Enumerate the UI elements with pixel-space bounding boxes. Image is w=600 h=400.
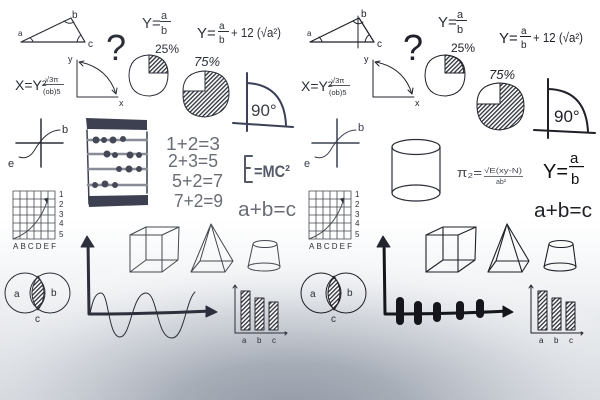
sums: 2+3=5 xyxy=(168,151,218,171)
grid chart xyxy=(13,190,64,251)
formula x=y2: X=Y² xyxy=(15,77,47,93)
grid chart: 3 xyxy=(59,210,64,219)
right angle 90: 90° xyxy=(251,101,277,120)
pie 75% xyxy=(477,67,524,130)
pie 25% xyxy=(425,41,475,96)
pyramid xyxy=(488,224,529,272)
formula y=a/b large: a xyxy=(570,150,579,167)
formula x=y2: X=Y² xyxy=(301,78,333,94)
formula x=y2: (ob)5 xyxy=(43,87,61,96)
venn diagram: b xyxy=(51,288,57,299)
bar chart abc: a xyxy=(242,336,247,345)
grid chart: 2 xyxy=(355,200,360,209)
cylinder xyxy=(392,140,440,201)
grid chart: 4 xyxy=(355,219,360,228)
formula pi: √E(xy-N) xyxy=(484,166,523,175)
pyramid xyxy=(191,224,233,272)
bar chart abc xyxy=(233,285,287,345)
formula y=a/b: a xyxy=(457,9,464,21)
formula y=a/b+12: Y= xyxy=(499,30,518,47)
question mark: ? xyxy=(106,27,126,68)
axis curve xy: y xyxy=(364,54,369,64)
formula y=a/b+12: b xyxy=(219,35,225,46)
axis curve xy xyxy=(364,54,420,108)
triangle abc: a xyxy=(18,29,23,38)
left panel doodles xyxy=(5,10,296,345)
formula y=a/b+12: Y= xyxy=(197,25,216,42)
venn diagram: a xyxy=(14,289,20,300)
grid chart: 3 xyxy=(355,210,360,219)
grid chart: 5 xyxy=(355,230,360,239)
a+b=c: a+b=c xyxy=(534,200,592,222)
venn diagram: c xyxy=(35,314,40,325)
bar chart abc: c xyxy=(272,336,276,345)
formula y=a/b: a xyxy=(161,10,168,22)
grid chart: 2 xyxy=(59,200,64,209)
venn diagram: a xyxy=(310,289,316,300)
bar chart abc: c xyxy=(569,336,573,345)
bar chart abc: b xyxy=(554,336,559,345)
sums: 1+2=3 xyxy=(166,134,220,154)
a+b=c: a+b=c xyxy=(238,199,296,221)
formula x=y2: (ob)5 xyxy=(329,88,347,97)
grid chart: ABCDEF xyxy=(309,242,352,251)
formula y=a/b+12: + 12 (√a²) xyxy=(231,25,281,40)
formula y=a/b xyxy=(438,9,467,36)
cross curve xyxy=(304,119,364,170)
cross curve xyxy=(8,119,68,170)
venn diagram: b xyxy=(347,288,353,299)
triangle with altitude: b xyxy=(361,9,367,20)
e=mc2 xyxy=(245,156,290,182)
axis curve xy xyxy=(68,54,124,108)
axis curve xy: y xyxy=(68,54,73,64)
pie 75% xyxy=(183,54,229,117)
arrow pill chart xyxy=(377,236,513,325)
sums xyxy=(166,134,223,211)
frustum xyxy=(544,240,576,271)
right angle 90 xyxy=(534,79,595,138)
grid chart: 1 xyxy=(355,190,360,199)
question mark: ? xyxy=(403,27,423,68)
formula y=a/b+12: a xyxy=(219,21,225,32)
right angle 90: 90° xyxy=(554,107,580,126)
pie 25%: 25% xyxy=(451,41,475,55)
bar chart abc xyxy=(529,285,583,345)
formula y=a/b: b xyxy=(457,24,463,36)
cube xyxy=(426,227,476,272)
formula y=a/b: Y= xyxy=(142,15,161,32)
formula y=a/b xyxy=(142,10,171,37)
formula y=a/b large: b xyxy=(571,171,579,188)
abacus xyxy=(86,118,148,207)
formula pi: ab² xyxy=(496,179,507,186)
formula y=a/b+12 xyxy=(197,21,281,46)
cross curve: e xyxy=(304,158,310,170)
axis curve xy: x xyxy=(119,98,124,108)
sums: 5+2=7 xyxy=(172,171,223,191)
formula pi xyxy=(457,165,523,186)
sums: 7+2=9 xyxy=(174,191,223,211)
formula y=a/b: Y= xyxy=(438,14,457,31)
grid chart xyxy=(309,190,360,251)
formula x=y2 xyxy=(15,75,64,96)
pie 75%: 75% xyxy=(489,67,515,82)
e=mc2: =MC² xyxy=(254,162,290,181)
grid chart: 4 xyxy=(59,219,64,228)
triangle abc xyxy=(18,10,93,50)
cross curve: e xyxy=(8,158,14,170)
triangle with altitude xyxy=(307,9,382,50)
arrow wave chart xyxy=(81,236,217,338)
formula x=y2: √3π xyxy=(45,75,58,84)
formula y=a/b: b xyxy=(161,25,167,37)
frustum xyxy=(248,240,280,271)
grid chart: ABCDEF xyxy=(13,242,56,251)
grid chart: 1 xyxy=(59,190,64,199)
formula y=a/b+12: b xyxy=(521,40,527,51)
formula y=a/b+12: + 12 (√a²) xyxy=(533,30,583,45)
bar chart abc: a xyxy=(539,336,544,345)
formula y=a/b large xyxy=(543,150,584,188)
triangle abc: c xyxy=(88,39,93,50)
right angle 90 xyxy=(233,73,293,131)
cube xyxy=(130,227,179,272)
triangle abc: b xyxy=(72,10,78,21)
cross curve: b xyxy=(62,124,68,136)
formula y=a/b large: Y= xyxy=(543,161,568,183)
right panel doodles xyxy=(301,9,595,345)
pie 25%: 25% xyxy=(155,42,179,56)
venn diagram xyxy=(301,273,366,325)
formula y=a/b+12: a xyxy=(521,26,527,37)
axis curve xy: x xyxy=(415,98,420,108)
formula x=y2 xyxy=(301,76,350,97)
pie 25% xyxy=(129,42,179,96)
cross curve: b xyxy=(358,122,364,134)
triangle with altitude: c xyxy=(377,39,382,50)
grid chart: 5 xyxy=(59,230,64,239)
triangle with altitude: a xyxy=(307,29,312,38)
bar chart abc: b xyxy=(257,336,262,345)
formula y=a/b+12 xyxy=(499,26,583,51)
formula x=y2: √3π xyxy=(331,76,344,85)
venn diagram: c xyxy=(331,314,336,325)
formula pi: π₂= xyxy=(457,165,482,180)
venn diagram xyxy=(5,273,70,325)
pie 75%: 75% xyxy=(194,54,220,69)
